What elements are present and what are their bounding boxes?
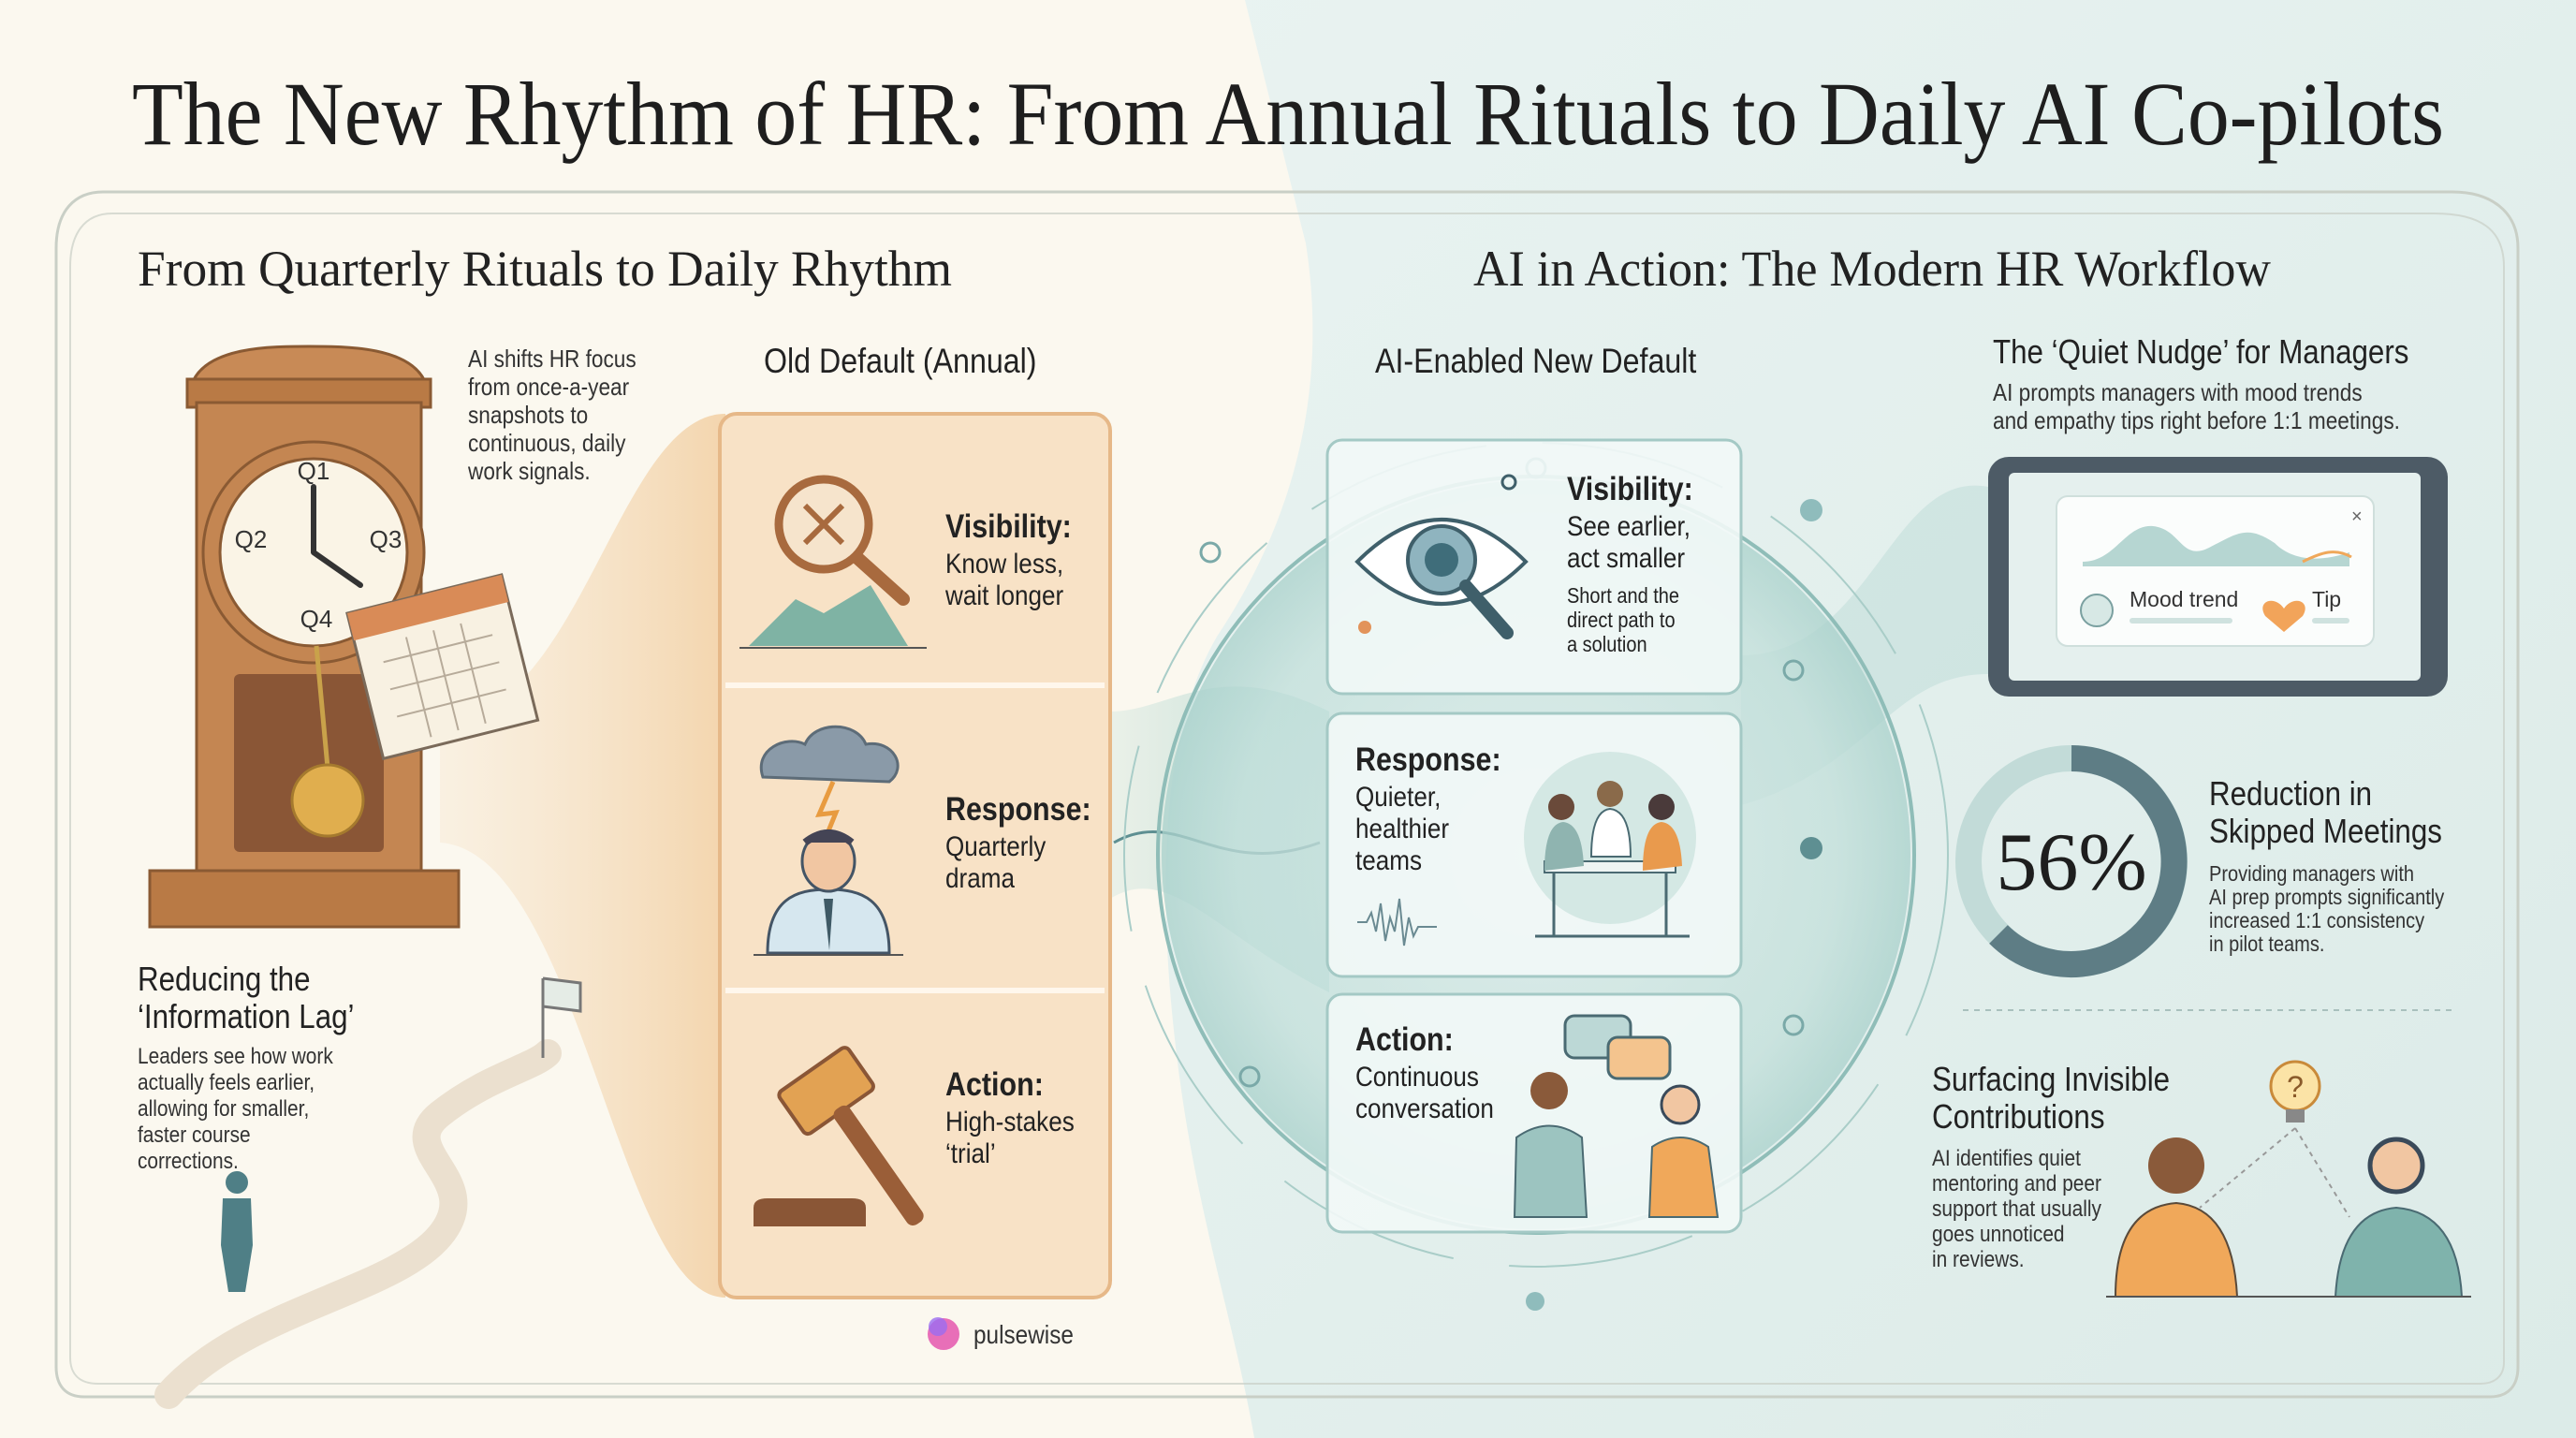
card: response new [1327, 713, 1741, 976]
panel: quiet nudge: AI prompts managers with mood trends [1993, 380, 2363, 406]
icon: storm and stressed person [754, 726, 903, 955]
heading: AI-Enabled New Default: AI-Enabled New Default [1375, 343, 1697, 381]
text: reducing the information lag: Leaders see how work [138, 1044, 334, 1068]
logo: pulsewise: pulsewise [973, 1319, 1074, 1349]
text: reducing the information lag [138, 961, 354, 1173]
text: action new: Continuous [1355, 1061, 1479, 1092]
clock illustration: Q4 [300, 605, 332, 633]
text: surfacing invisible contributions: in reviews. [1932, 1247, 2025, 1271]
icon: tablet with mood trend popup [1988, 457, 2448, 697]
panel: old default [720, 414, 1110, 1298]
text: reducing the information lag: faster course [138, 1123, 251, 1147]
title: The New Rhythm of HR: From Annual Rituals to Daily AI Co-pilots [132, 64, 2444, 164]
text: response new: teams [1355, 844, 1422, 875]
text: reducing the information lag: ‘Information Lag’ [138, 998, 354, 1036]
text: action old: High-stakes [945, 1106, 1075, 1137]
text: response new: Quieter, [1355, 781, 1441, 812]
text: surfacing invisible contributions: goes unnoticed [1932, 1222, 2065, 1246]
icon: tablet with mood trend popup: Mood trend [2130, 587, 2238, 611]
icon: gavel [754, 1046, 953, 1247]
text: surfacing invisible contributions: mentoring and peer [1932, 1171, 2101, 1196]
illustration: two colleagues with lightbulb [2106, 1062, 2471, 1297]
clock illustration [150, 346, 538, 927]
teal flows [1110, 486, 1988, 992]
clock illustration: Q3 [370, 525, 402, 553]
text: surfacing invisible contributions: Surfacing Invisible [1932, 1061, 2170, 1099]
text: reducing the information lag: actually feels earlier, [138, 1070, 315, 1094]
text: reduction in skipped meetings: in pilot teams. [2209, 932, 2324, 956]
clock illustration: Q2 [235, 525, 267, 553]
text: reduction in skipped meetings: Reduction in [2209, 775, 2372, 814]
text: reducing the information lag: Reducing the [138, 961, 311, 999]
card: visibility new [1327, 440, 1741, 694]
text: action old: ‘trial’ [945, 1137, 996, 1168]
logo: pulsewise [928, 1317, 1074, 1350]
heading: right section: AI in Action: The Modern HR Workflow [1473, 241, 2271, 297]
panel: quiet nudge: and empathy tips right before 1:1 meetings. [1993, 408, 2400, 434]
text: reducing the information lag: corrections. [138, 1149, 239, 1173]
illustration: winding road with person [168, 978, 580, 1395]
panel: quiet nudge [1988, 333, 2448, 697]
text: reduction in skipped meetings [2209, 775, 2444, 956]
text: response old: Quarterly [945, 830, 1046, 861]
text: response old: drama [945, 862, 1015, 893]
text: visibility new: Visibility: [1567, 470, 1693, 506]
text: AI shifts HR focus: snapshots to [468, 403, 588, 429]
text: surfacing invisible contributions: Contributions [1932, 1098, 2104, 1137]
donut chart: 56%: 56% [1996, 817, 2147, 908]
funnel flow from clock to old panel [440, 414, 725, 1298]
text: visibility old: Know less, [945, 548, 1063, 579]
icon: tablet with mood trend popup: × [2351, 506, 2363, 527]
orb ring [1124, 443, 1948, 1311]
text: action new: Action: [1355, 1020, 1454, 1057]
text: reduction in skipped meetings: increased 1:1 consistency [2209, 908, 2424, 932]
card: action new [1327, 994, 1741, 1232]
donut chart: 56% [1969, 758, 2174, 964]
text: response old: Response: [945, 790, 1091, 827]
text: AI shifts HR focus: AI shifts HR focus [468, 346, 637, 373]
text: AI shifts HR focus: from once-a-year [468, 374, 629, 401]
text: reduction in skipped meetings: Skipped Meetings [2209, 813, 2442, 851]
text: visibility old: Visibility: [945, 507, 1072, 544]
clock illustration: Q1 [298, 457, 329, 485]
text: reduction in skipped meetings: Providing managers with [2209, 861, 2414, 886]
text: AI shifts HR focus: work signals. [467, 459, 591, 485]
text: action old: Action: [945, 1065, 1044, 1102]
illustration: two colleagues with lightbulb: ? [2287, 1070, 2304, 1104]
icon: eye magnifier [1357, 476, 1526, 634]
text: response new: Response: [1355, 741, 1501, 777]
text: visibility new: a solution [1567, 632, 1647, 656]
text: surfacing invisible contributions [1932, 1061, 2170, 1271]
text: surfacing invisible contributions: AI identifies quiet [1932, 1146, 2082, 1170]
text: visibility new: See earlier, [1567, 510, 1690, 541]
heading: Old Default: Old Default (Annual) [764, 343, 1036, 381]
text: visibility new: act smaller [1567, 542, 1685, 573]
text: surfacing invisible contributions: support that usually [1932, 1196, 2102, 1221]
panel: quiet nudge: The ‘Quiet Nudge’ for Managers [1993, 333, 2408, 372]
icon: team meeting [1524, 752, 1696, 936]
text: reduction in skipped meetings: AI prep prompts significantly [2209, 885, 2444, 909]
icon: sound wave [1357, 899, 1437, 946]
text: response new: healthier [1355, 813, 1449, 844]
text: visibility old: wait longer [944, 580, 1063, 610]
text: visibility new: Short and the [1567, 583, 1679, 608]
text: action new: conversation [1355, 1093, 1494, 1123]
text: visibility new: direct path to [1567, 608, 1676, 632]
text: AI shifts HR focus: continuous, daily [468, 431, 626, 457]
heading: left section: From Quarterly Rituals to Daily Rhythm [138, 241, 952, 297]
text: reducing the information lag: allowing for smaller, [138, 1096, 309, 1121]
icon: tablet with mood trend popup: Tip [2312, 587, 2341, 611]
icon: magnifier with X [739, 479, 927, 648]
icon: two people talking [1515, 1016, 1718, 1217]
